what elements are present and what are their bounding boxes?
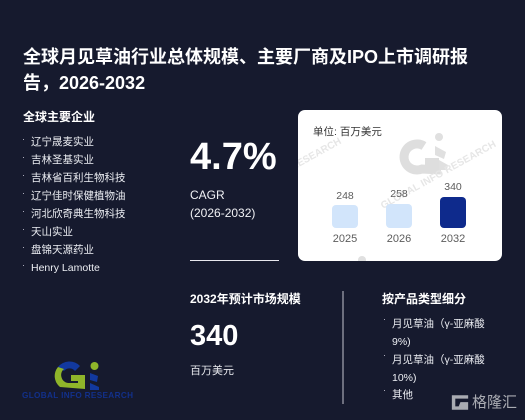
bar 2026	[386, 188, 412, 245]
CAGR label: CAGR	[190, 188, 225, 202]
company list: Henry Lamotte	[31, 262, 100, 274]
market size value: 340	[190, 320, 238, 352]
watermark: GLOBAL INFO RESEARCH	[379, 139, 498, 212]
CAGR value: 4.7%	[190, 136, 277, 178]
logo: Global Info Research	[22, 362, 133, 400]
bar 2026: 2026	[387, 233, 411, 245]
bar 2025: 2025	[333, 233, 357, 245]
company list	[23, 136, 126, 274]
CAGR label	[190, 188, 255, 220]
brand name: 格隆汇	[472, 394, 517, 411]
logo: Gelonghui	[452, 394, 517, 411]
market size unit: 百万美元	[190, 365, 234, 377]
segment list: 月见草油（γ-亚麻酸	[392, 354, 485, 366]
market size heading: 2032年预计市场规模	[190, 292, 301, 306]
logo: Global Info Research: GLOBAL INFO RESEARCH	[22, 391, 133, 400]
bar 2025	[332, 190, 358, 245]
heading: segments: 按产品类型细分	[382, 292, 466, 306]
segment list: 其他	[392, 389, 413, 401]
CAGR label: (2026-2032)	[190, 206, 255, 220]
company list: 辽宁晟麦实业	[31, 136, 94, 148]
panel: product type segments	[382, 292, 485, 401]
title: 告，2026-2032	[23, 73, 145, 93]
segment list: 10%)	[392, 372, 417, 384]
company list: 天山实业	[31, 226, 73, 238]
bar 2025: 248	[336, 190, 354, 202]
company list: 河北欣奇典生物科技	[31, 208, 126, 220]
company list: 吉林省百利生物科技	[31, 172, 126, 184]
unit label: 单位: 百万美元	[313, 126, 382, 138]
company list: 盘锦天源药业	[31, 244, 94, 256]
panel: bar chart card	[298, 110, 502, 261]
watermark	[298, 133, 498, 261]
title	[23, 47, 468, 93]
heading: companies: 全球主要企业	[23, 110, 95, 124]
segment list: 9%)	[392, 336, 411, 348]
company list: 辽宁佳时保健植物油	[31, 190, 126, 202]
segment list	[384, 318, 485, 401]
bar 2032	[440, 181, 466, 245]
title: 全球月见草油行业总体规模、主要厂商及IPO上市调研报	[23, 47, 468, 67]
icon: G mark	[452, 395, 468, 410]
bar 2032: 2032	[441, 233, 465, 245]
segment list: 月见草油（γ-亚麻酸	[392, 318, 485, 330]
bar 2032: 340	[444, 181, 462, 193]
bar 2026: 258	[390, 188, 408, 200]
panel: global key companies	[23, 110, 126, 274]
company list: 吉林圣基实业	[31, 154, 94, 166]
